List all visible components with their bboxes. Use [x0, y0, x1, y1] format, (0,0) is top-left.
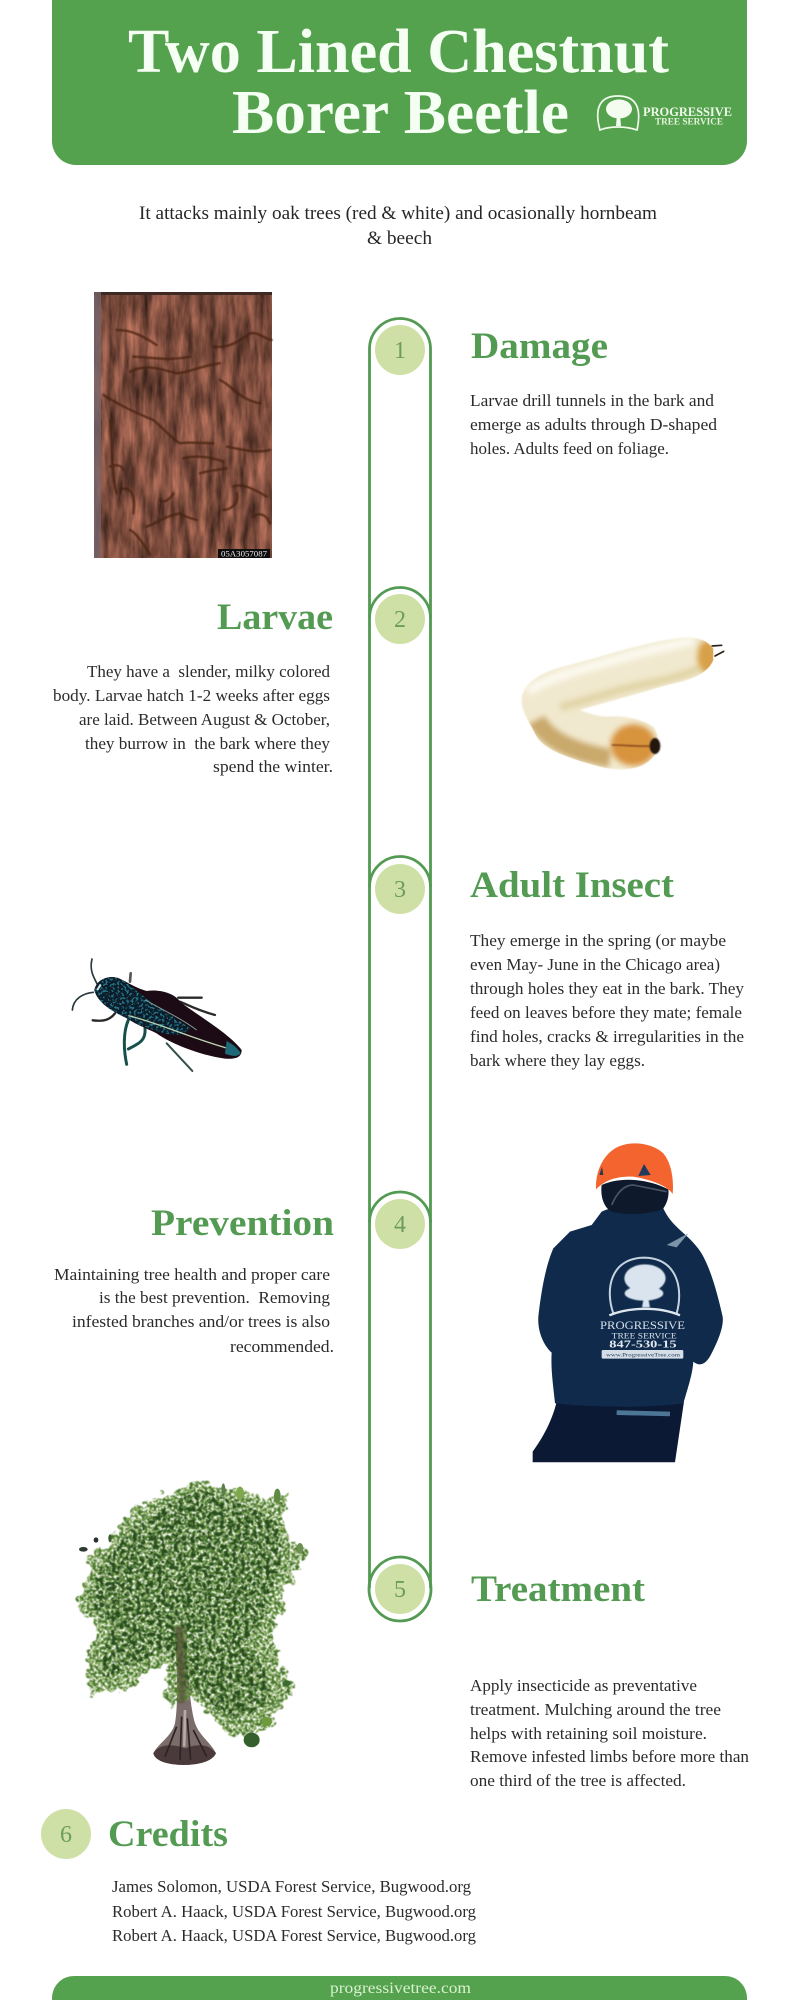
body: Treatment: Apply insecticide as preventative: [470, 1676, 697, 1695]
body: Adult Insect: feed on leaves before they mate; female: [470, 1003, 742, 1022]
body: Larvae: they burrow in the bark where they: [85, 734, 331, 753]
body: Damage: holes. Adults feed on foliage.: [470, 439, 669, 458]
helmet: [596, 1143, 673, 1194]
step 2 marker: [375, 594, 425, 644]
body: Treatment: [470, 1676, 749, 1790]
logo: Progressive Tree Service: [598, 96, 732, 130]
step 6 marker: [41, 1809, 91, 1859]
image: larva: [522, 638, 724, 769]
body: Larvae: body. Larvae hatch 1-2 weeks after eggs: [53, 686, 330, 705]
body: Damage: [470, 391, 718, 458]
title: Two Lined Chestnut: [128, 18, 669, 86]
body: Prevention: recommended.: [230, 1337, 334, 1356]
body: Treatment: Remove infested limbs before more than: [470, 1747, 749, 1766]
step 5 marker: 5: [394, 1577, 406, 1603]
heading: Larvae: Larvae: [217, 597, 333, 638]
body: Treatment: treatment. Mulching around the tree: [470, 1700, 721, 1719]
section: Damage: [470, 326, 718, 458]
body: Prevention: Maintaining tree health and proper care: [54, 1265, 330, 1284]
step 3 marker: 3: [394, 877, 406, 903]
intro text: [139, 204, 658, 249]
heading: Credits: Credits: [108, 1814, 228, 1855]
body: Larvae: [53, 662, 333, 776]
credit lines: Robert A. Haack, USDA Forest Service, Bugwood.org: [112, 1926, 476, 1945]
body: Damage: Larvae drill tunnels in the bark and: [470, 391, 715, 410]
step 6 marker: 6: [60, 1822, 72, 1848]
footer bar: [52, 1976, 747, 2000]
hoodie: [538, 1204, 723, 1407]
hoodie logo: [600, 1258, 685, 1359]
step 4 marker: 4: [394, 1212, 406, 1238]
step 1 marker: [375, 325, 425, 375]
body: Treatment: one third of the tree is affected.: [470, 1771, 686, 1790]
body: Treatment: helps with retaining soil moisture.: [470, 1724, 707, 1743]
step 5 marker: [375, 1564, 425, 1614]
image: tree service worker: [533, 1143, 723, 1462]
intro text: & beech: [367, 229, 432, 249]
hoodie logo: 847-530-15: [609, 1339, 677, 1350]
head and hood: [601, 1180, 669, 1214]
image: adult beetle: [72, 959, 242, 1071]
body: Larvae: spend the winter.: [213, 757, 333, 776]
body: Adult Insect: even May- June in the Chicago area): [470, 955, 720, 974]
body: Adult Insect: [470, 931, 745, 1070]
credit lines: Robert A. Haack, USDA Forest Service, Bugwood.org: [112, 1902, 476, 1921]
image id tag: 05A3057087: [221, 550, 267, 558]
section: Adult Insect: [470, 865, 745, 1070]
section: Larvae: [53, 597, 333, 776]
heading: Damage: Damage: [471, 326, 608, 367]
step 1 marker: 1: [394, 338, 406, 364]
logo: Progressive Tree Service: TREE SERVICE: [655, 116, 723, 126]
stray leaves: [79, 1483, 303, 1747]
body: Adult Insect: through holes they eat in the bark. They: [470, 979, 745, 998]
pants: [533, 1402, 684, 1462]
body: Prevention: [54, 1265, 334, 1356]
title: [128, 18, 669, 147]
section: Prevention: [54, 1203, 334, 1356]
heading: Prevention: Prevention: [151, 1203, 334, 1244]
credit lines: [112, 1877, 476, 1945]
logo: Progressive Tree Service: PROGRESSIVE: [643, 104, 732, 119]
step 4 marker: [375, 1199, 425, 1249]
body: Prevention: is the best prevention. Removing: [99, 1288, 330, 1307]
heading: Treatment: Treatment: [471, 1569, 646, 1610]
photo: bark galleries: [94, 292, 272, 558]
hoodie logo: TREE SERVICE: [612, 1331, 677, 1341]
image: tree: [79, 1481, 304, 1765]
timeline rail: [369, 318, 431, 1621]
step 3 marker: [375, 864, 425, 914]
section: Treatment: [470, 1569, 749, 1790]
credit lines: James Solomon, USDA Forest Service, Bugwood.org: [112, 1877, 471, 1896]
body: Damage: emerge as adults through D-shaped: [470, 415, 718, 434]
section: Credits: [41, 1809, 476, 1945]
roots and trunk: [153, 1627, 216, 1765]
hoodie logo: PROGRESSIVE: [600, 1318, 685, 1332]
body: Adult Insect: They emerge in the spring (or maybe: [470, 931, 726, 950]
body: Adult Insect: find holes, cracks & irregularities in the: [470, 1027, 744, 1046]
body: Larvae: They have a slender, milky colored: [87, 662, 331, 681]
timeline: [369, 318, 431, 1621]
step 2 marker: 2: [394, 607, 406, 633]
body: Larvae: are laid. Between August & October,: [79, 710, 330, 729]
title: Borer Beetle: [232, 79, 569, 147]
body: Prevention: infested branches and/or trees is also: [72, 1312, 330, 1331]
heading: Adult Insect: Adult Insect: [470, 865, 675, 906]
website: progressivetree.com: [330, 1980, 472, 1997]
header banner: [52, 0, 747, 165]
hoodie logo: www.ProgressiveTree.com: [606, 1352, 681, 1358]
body: Adult Insect: bark where they lay eggs.: [470, 1051, 645, 1070]
canopy: [79, 1481, 304, 1747]
intro text: It attacks mainly oak trees (red & white) and ocasionally hornbeam: [139, 204, 658, 224]
